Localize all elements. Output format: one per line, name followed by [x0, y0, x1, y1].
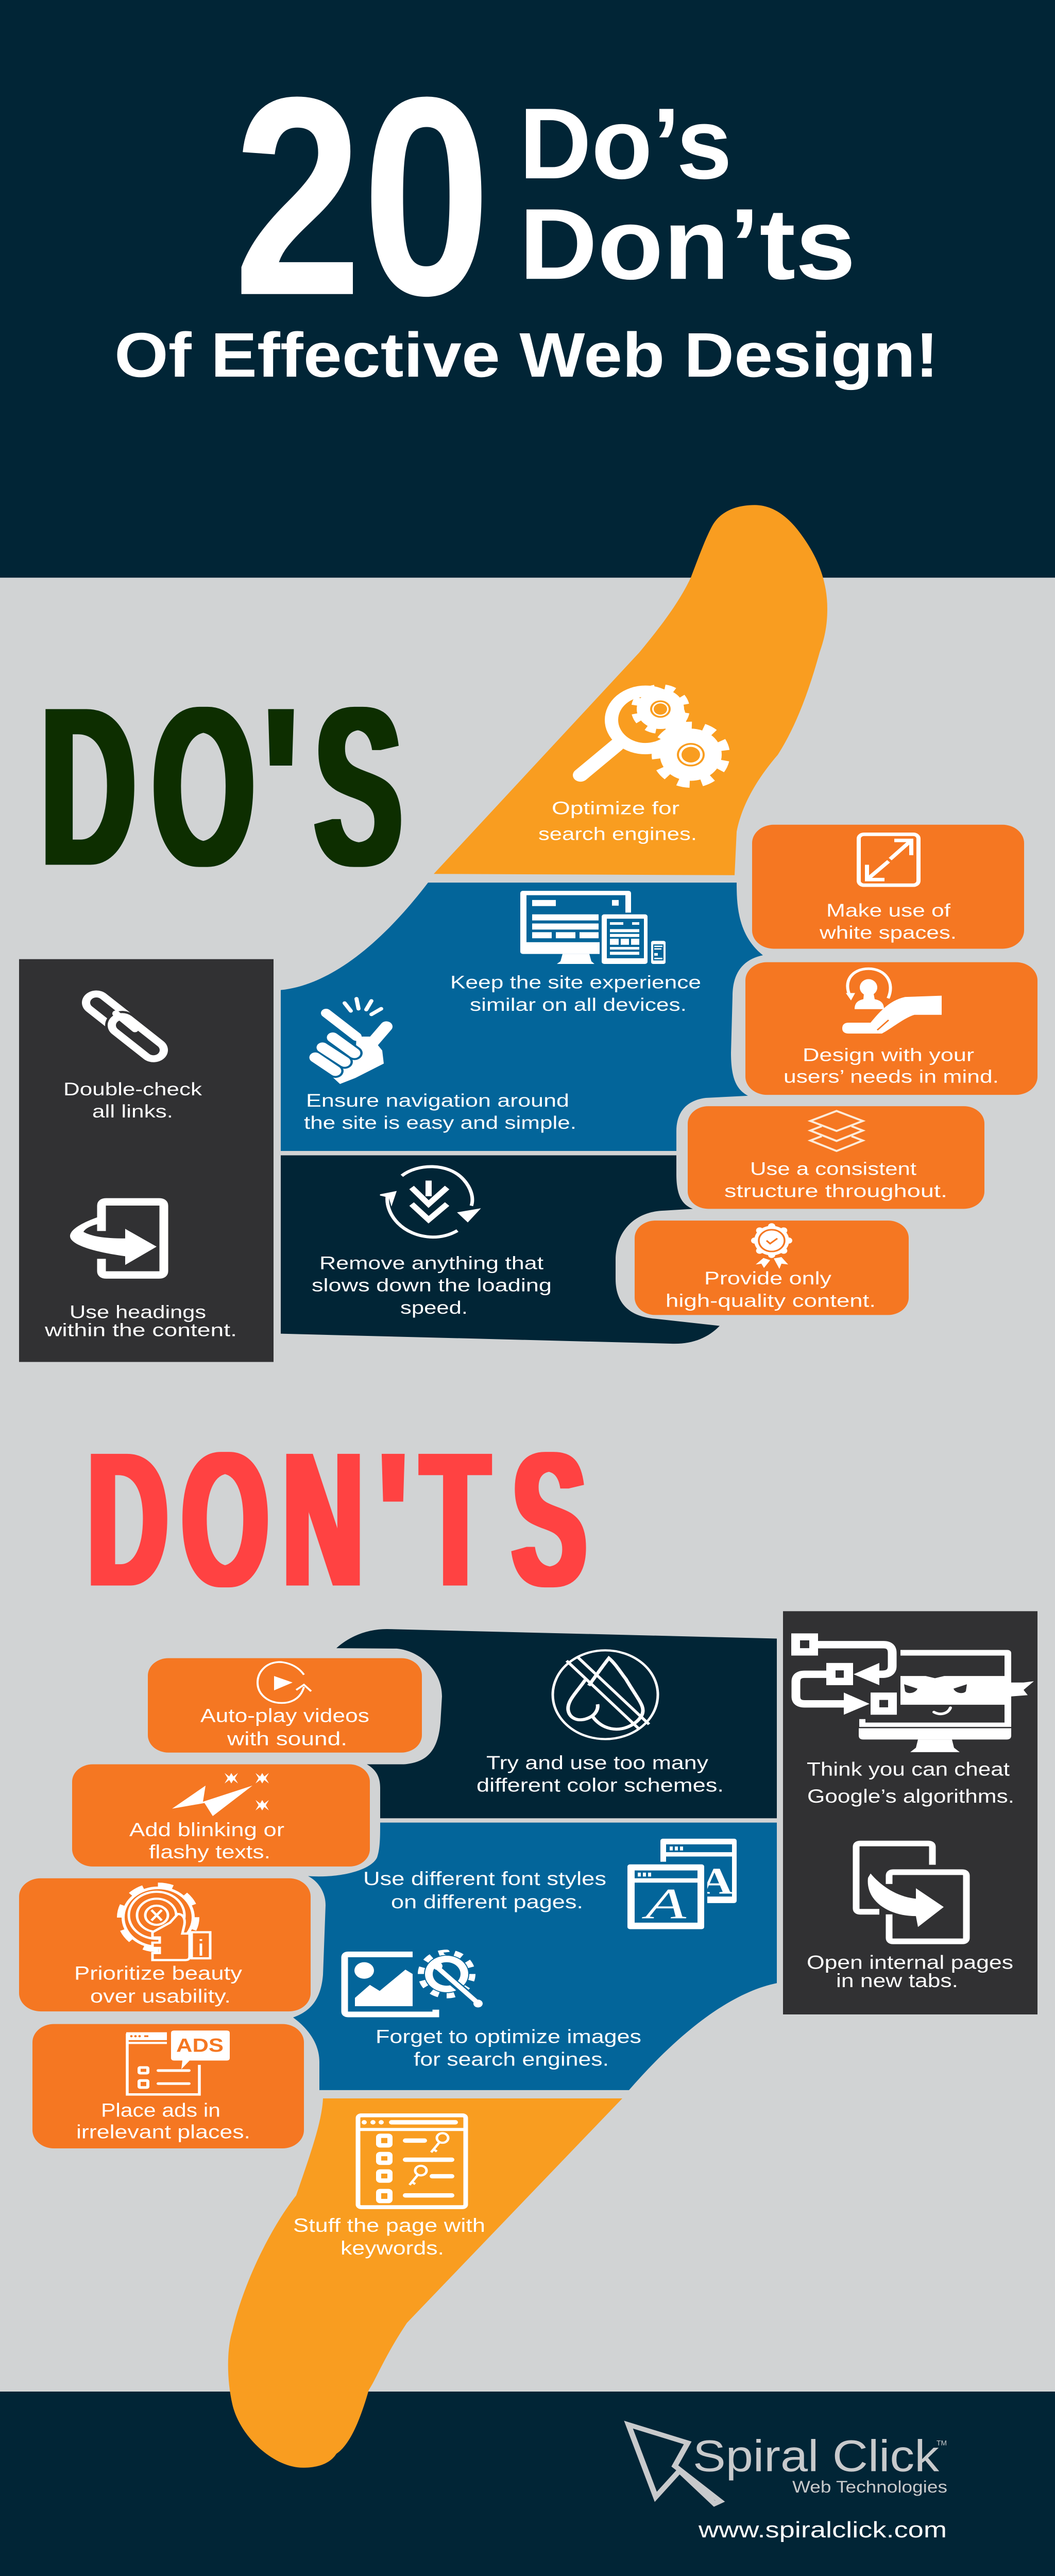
text: devices: Keep the site experience: [450, 972, 701, 992]
card: beauty over usability: [19, 1878, 311, 2011]
icon: exit door arrow: [70, 1202, 164, 1275]
text: blinking: Add blinking or: [129, 1819, 284, 1840]
panel: dark color schemes: different color schemes.: [477, 1774, 724, 1796]
icon: gear target and hand: [120, 1885, 210, 1960]
heading DO'S: DO'S: [41, 660, 402, 913]
card: auto-play videos: [148, 1658, 422, 1753]
card: beauty over usability: over usability.: [90, 1985, 231, 2007]
panel: blue navigation and devices: similar on all devices.: [470, 995, 687, 1015]
card: irrelevant ads: irrelevant places.: [76, 2121, 250, 2143]
panel: blue navigation and devices: the site is easy and simple.: [304, 1113, 576, 1133]
icon: image and wrench gear: [345, 1952, 483, 2014]
panel: dark gray google and tabs: [783, 1611, 1037, 2014]
panel: optimize for search engines: [434, 505, 827, 875]
panel: dark loading speed: speed.: [400, 1298, 468, 1318]
panel: dark loading speed: [281, 1155, 720, 1344]
text: font styles: Use different font styles: [363, 1868, 606, 1889]
panel: blue navigation and devices: [281, 883, 763, 1151]
icon: ads window: [126, 2030, 230, 2094]
subtitle: Of Effective Web Design!: [114, 320, 939, 391]
card: white spaces: white spaces.: [819, 923, 957, 943]
icon: font windows: [624, 1839, 737, 1932]
brand name: Spiral Click: [693, 2432, 940, 2481]
icon: ninja monitor and flow: [791, 1633, 1034, 1752]
card: quality content: high-quality content.: [666, 1291, 876, 1311]
card: blinking texts: [72, 1765, 370, 1867]
brand tagline: Web Technologies: [792, 2478, 947, 2496]
text: auto-play: Auto-play videos: [200, 1705, 369, 1726]
icon: ads window: ADS: [176, 2035, 224, 2056]
title: [114, 38, 939, 391]
text: cheat algorithms: Think you can cheat: [807, 1758, 1010, 1780]
card: users' needs: [745, 962, 1037, 1095]
text: headings: Use headings: [70, 1302, 206, 1322]
icon: keyword list: [356, 2115, 467, 2207]
panel: optimize for search engines: search engines.: [538, 824, 697, 844]
icon: font windows: A: [701, 1860, 733, 1902]
panel: dark gray links and headings: [19, 959, 274, 1362]
icon: award badge: [754, 1226, 789, 1269]
text: beauty: Prioritize beauty: [74, 1962, 243, 1984]
icon: finger snap hand: [315, 999, 386, 1084]
icon: new tab arrow: [856, 1843, 966, 1941]
panel: blue fonts and images: on different pages.: [391, 1891, 583, 1912]
panel: blue fonts and images: [293, 1823, 777, 2090]
icon: expand arrows: [859, 834, 918, 885]
panel: dark loading speed: slows down the loading: [312, 1276, 552, 1296]
text: structure: Use a consistent: [750, 1159, 916, 1179]
text: optimize: Optimize for: [552, 799, 679, 819]
icon: cursor arrow: [628, 2425, 720, 2504]
icon: crossed drops: [553, 1650, 658, 1739]
icon: chain link: [96, 1003, 154, 1050]
icon: responsive devices: [520, 891, 666, 965]
website url: www.spiralclick.com: [698, 2517, 947, 2543]
text: quality content: Provide only: [704, 1268, 832, 1289]
panel: dark color schemes: [336, 1629, 777, 1818]
panel: blue fonts and images: for search engines.: [414, 2048, 609, 2070]
text: users' needs: Design with your: [803, 1045, 974, 1065]
text: optimize images: Forget to optimize images: [376, 2026, 641, 2047]
card: irrelevant ads: [32, 2024, 304, 2148]
card: users' needs: users’ needs in mind.: [784, 1066, 999, 1087]
panel: dark gray links and headings: all links.: [92, 1101, 173, 1122]
icon: font windows: A: [641, 1880, 687, 1928]
text: ads: Place ads in: [101, 2099, 220, 2121]
icon: play with arrow: [258, 1662, 311, 1703]
panel: dark gray google and tabs: Google’s algorithms.: [807, 1785, 1014, 1807]
text: keywords: Stuff the page with: [293, 2214, 485, 2236]
text: white spaces: Make use of: [826, 901, 950, 921]
text: color schemes: Try and use too many: [486, 1752, 709, 1773]
text: navigation: Ensure navigation around: [306, 1091, 569, 1111]
icon: lightning and sparks: [172, 1773, 269, 1816]
panel: dark gray links and headings: within the content.: [44, 1320, 237, 1341]
card: consistent structure: structure throughout.: [724, 1181, 947, 1201]
title word Don'ts: Don’ts: [519, 188, 856, 300]
panel: stuff keywords: [228, 2098, 622, 2468]
text: double-check: Double-check: [63, 1079, 202, 1099]
card: quality content: [635, 1221, 909, 1315]
title word Do's: Do’s: [519, 88, 732, 200]
card: white spaces: [752, 825, 1024, 948]
text: loading speed: Remove anything that: [319, 1253, 543, 1274]
card: consistent structure: [688, 1106, 984, 1209]
icon: reload with download arrow: [380, 1166, 479, 1237]
trademark: TM: [937, 2440, 947, 2447]
panel: dark gray google and tabs: in new tabs.: [836, 1970, 958, 1991]
heading DON'TS: DON'TS: [88, 1413, 586, 1626]
icon: user in hand: [842, 969, 942, 1033]
footer band: [0, 2392, 1055, 2576]
card: auto-play videos: with sound.: [227, 1728, 347, 1750]
panel: stuff keywords: keywords.: [341, 2237, 444, 2259]
header band: [0, 0, 1055, 578]
icon: magnifier and gears: [581, 684, 731, 789]
text: new tabs: Open internal pages: [807, 1952, 1013, 1973]
title number 20: 20: [233, 38, 491, 354]
logo: spiral click: [628, 2425, 947, 2504]
icon: stacked layers: [810, 1111, 863, 1151]
card: blinking texts: flashy texts.: [149, 1841, 270, 1862]
